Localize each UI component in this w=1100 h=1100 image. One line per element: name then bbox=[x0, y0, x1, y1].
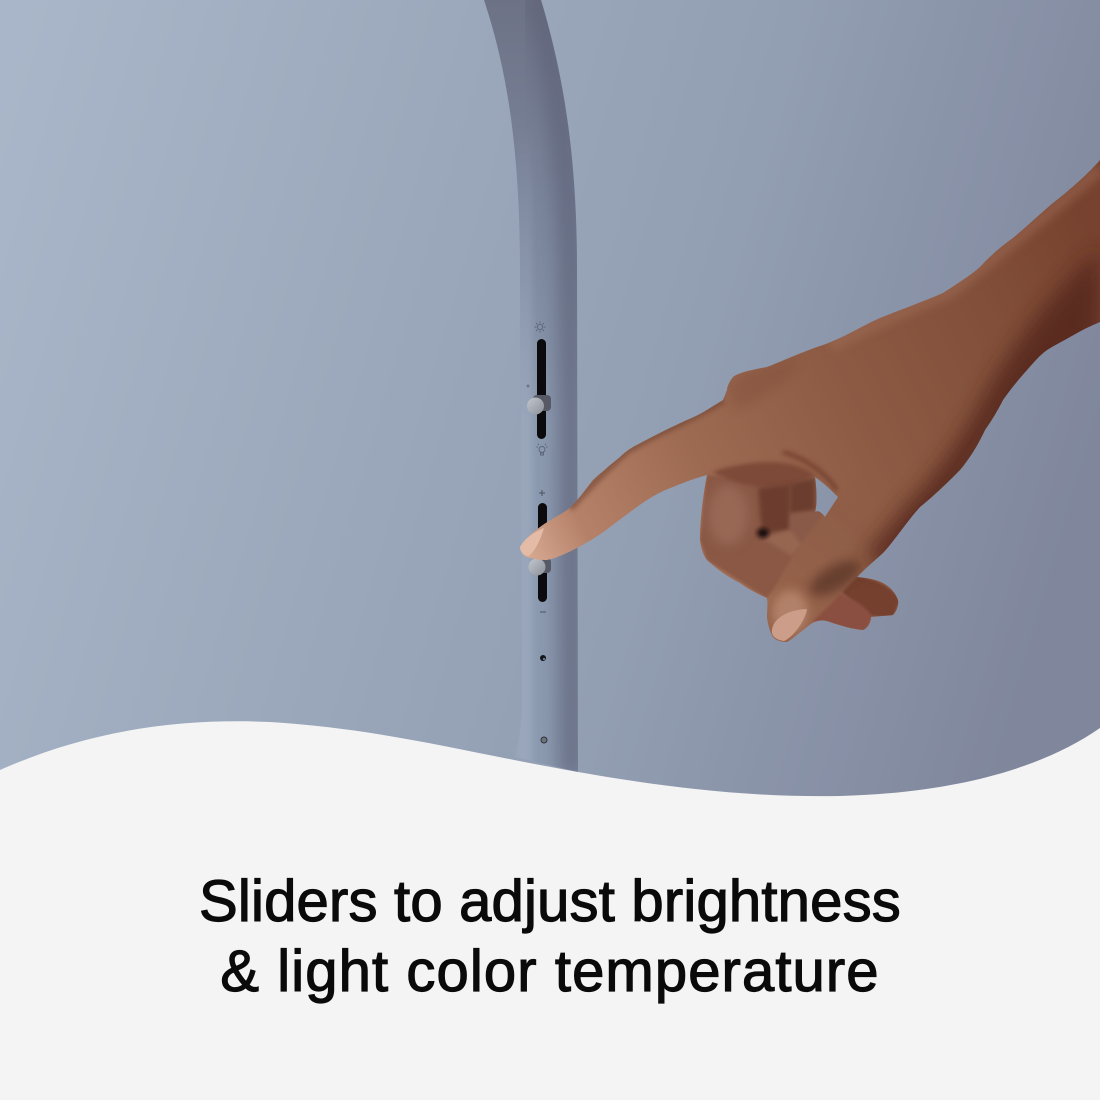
thumb tip light bbox=[772, 590, 808, 634]
palm crevice bbox=[757, 528, 769, 538]
caption heading: Sliders to adjust brightness bbox=[199, 869, 901, 934]
index fingernail bbox=[520, 528, 544, 556]
photo background bbox=[0, 0, 1100, 800]
knuckle area bbox=[736, 379, 758, 400]
hand pointing at slider bbox=[520, 160, 1100, 644]
pole buttons bbox=[540, 655, 547, 743]
forearm highlight bbox=[830, 168, 1100, 345]
lower curled segment bbox=[790, 515, 794, 519]
underside of index bbox=[712, 462, 815, 487]
wrist shadow bbox=[865, 250, 1100, 570]
middle curled segment bbox=[758, 484, 790, 534]
curled ring finger bbox=[842, 576, 898, 617]
palm crease bbox=[783, 452, 837, 490]
caption heading: & light color temperature bbox=[220, 939, 880, 1004]
folded index finger base bbox=[700, 475, 825, 598]
index finger top shadow bbox=[570, 400, 723, 508]
lamp pole bbox=[484, 0, 578, 780]
lit folded knuckle bbox=[708, 485, 748, 545]
thumb bbox=[767, 497, 898, 642]
thumbnail bbox=[772, 609, 807, 641]
thumb knuckle crease bbox=[806, 557, 863, 600]
icon: sun bbox=[534, 322, 546, 332]
brightness slider bbox=[526, 322, 551, 455]
icon: bulb bbox=[536, 444, 548, 455]
white wave panel bbox=[0, 721, 1100, 1100]
caption heading bbox=[199, 869, 901, 1004]
ring curled segment bbox=[790, 478, 815, 514]
curled middle finger bbox=[814, 594, 872, 630]
temperature slider bbox=[528, 490, 551, 612]
textured fingertips bbox=[767, 530, 800, 554]
